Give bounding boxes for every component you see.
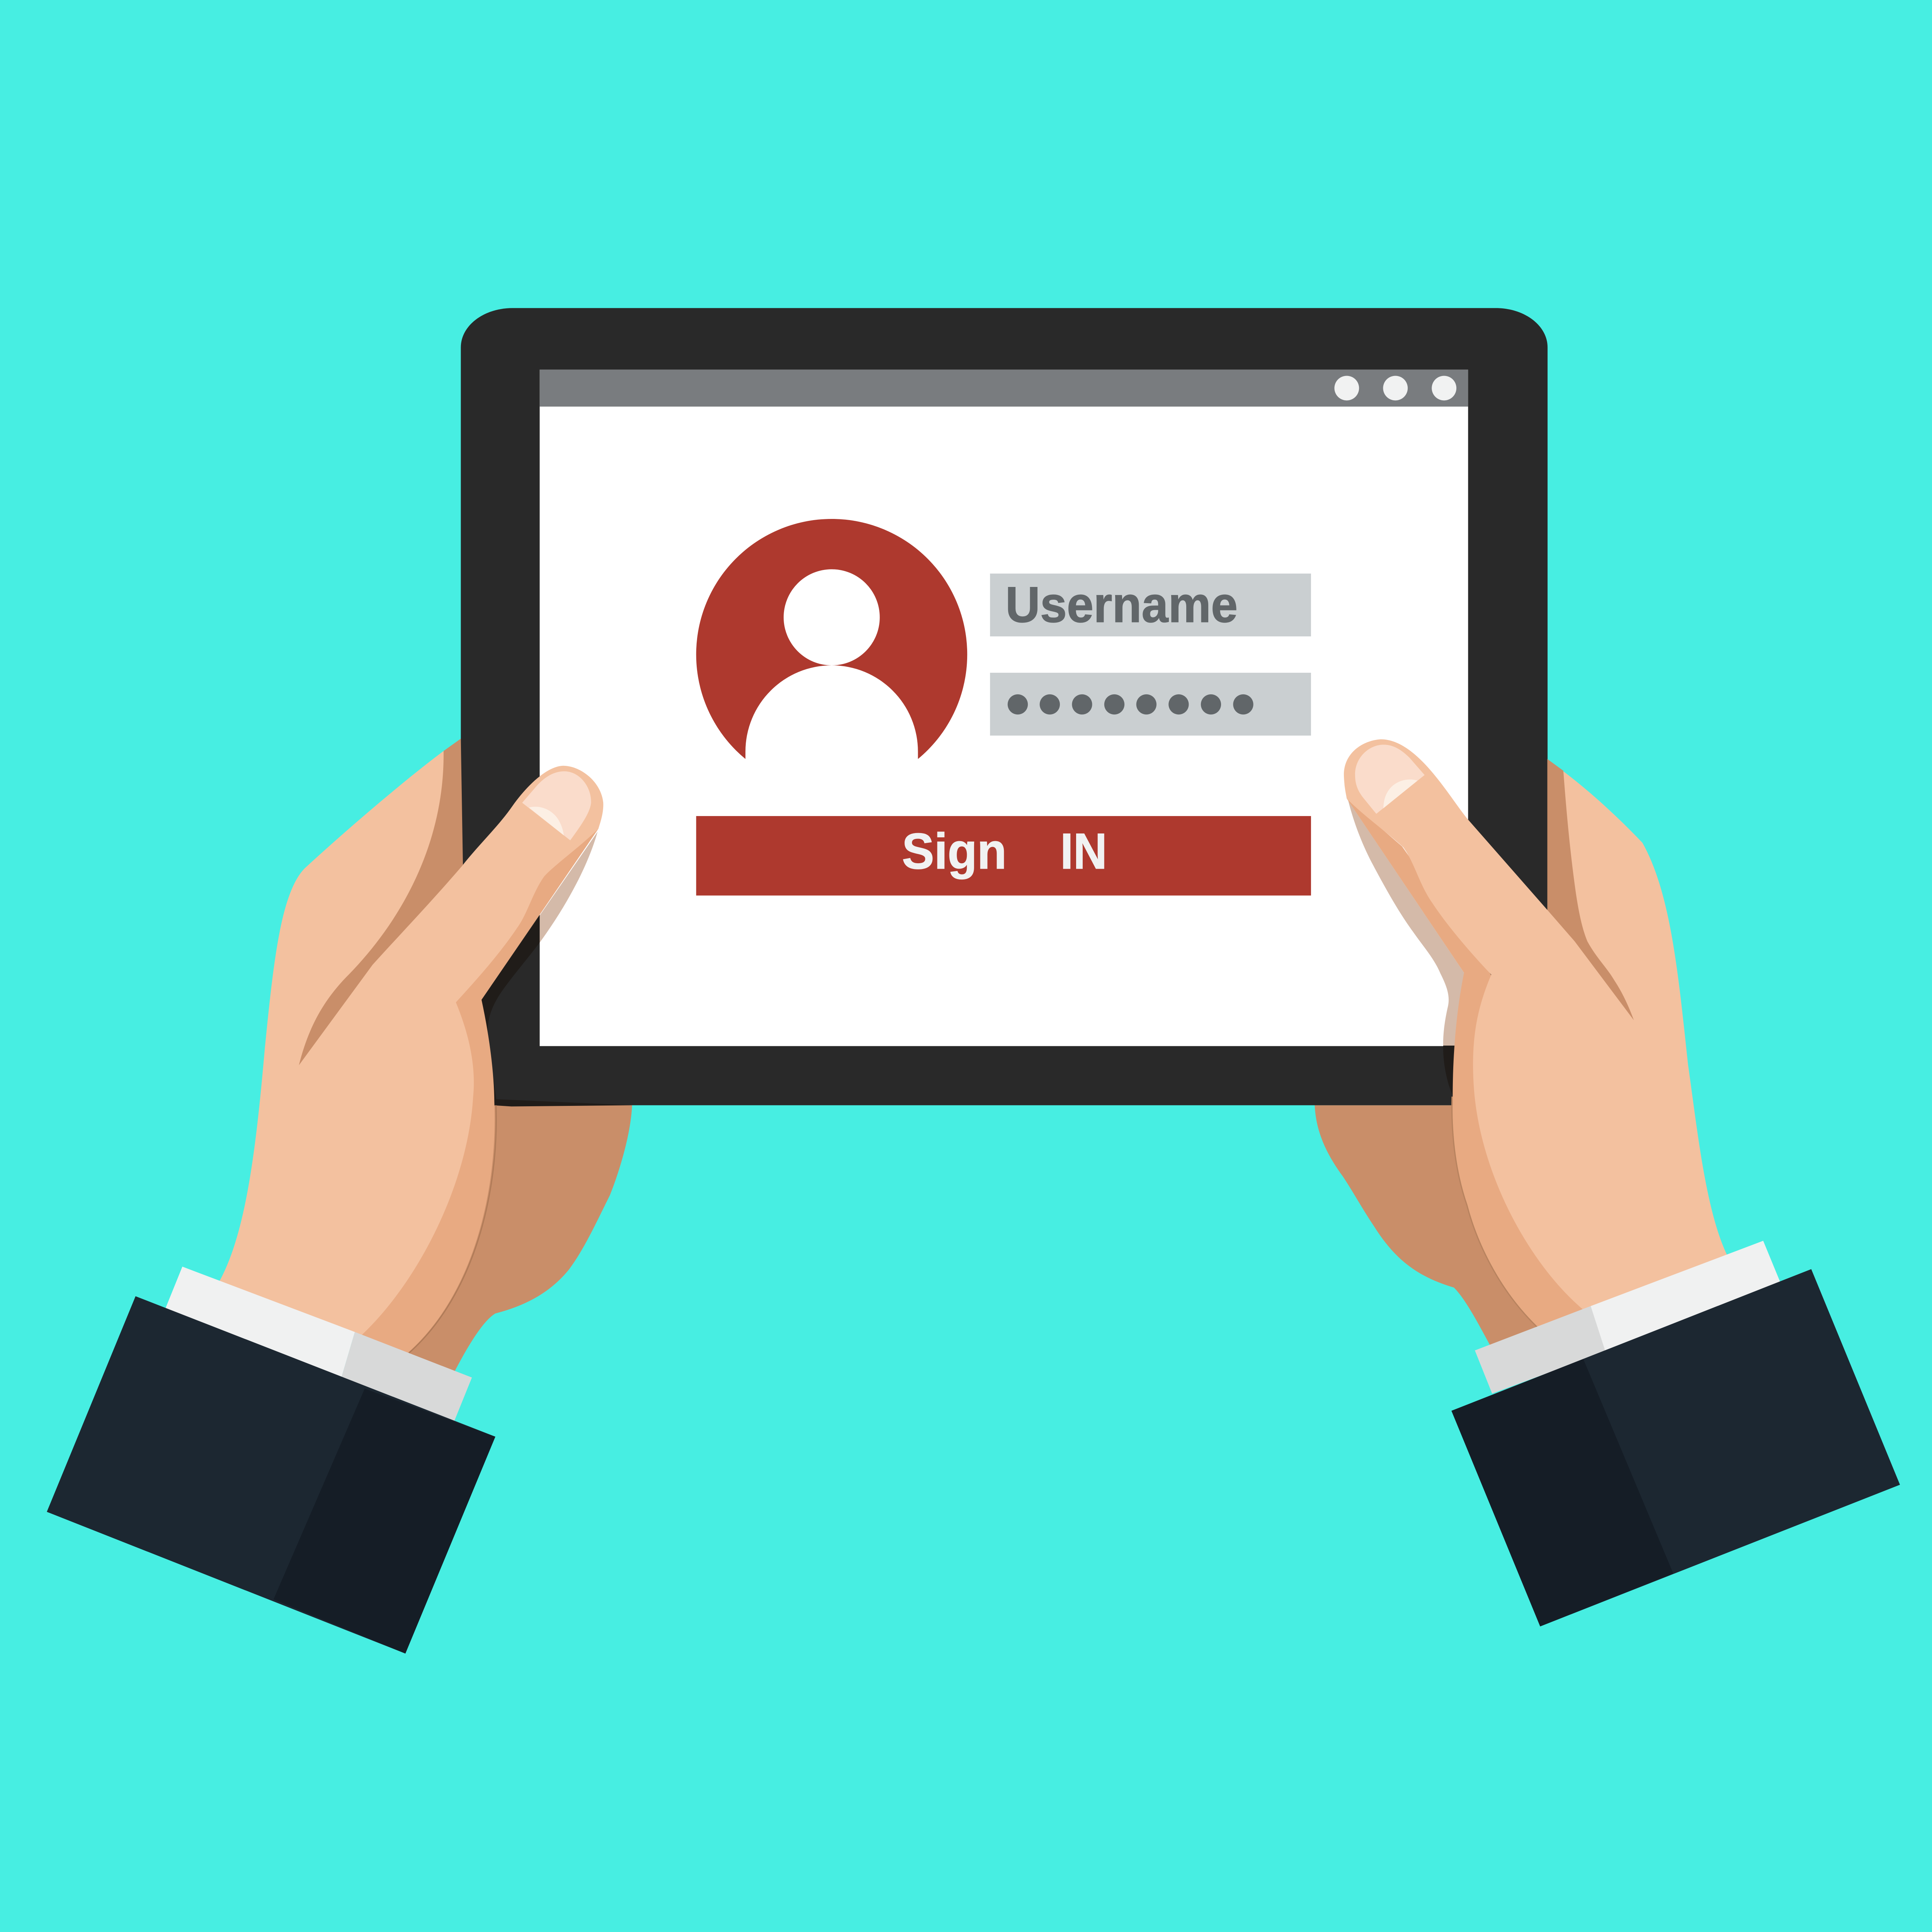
left shirt cuff (162, 1267, 355, 1386)
left sleeve (47, 1296, 495, 1653)
right hand shaded side (1347, 799, 1583, 1327)
screen (540, 370, 1468, 1046)
left shirt cuff shaded (339, 1332, 472, 1429)
left hand inner edge line (409, 1105, 496, 1353)
left thumb shadow on screen (540, 832, 598, 942)
right sleeve (1451, 1269, 1900, 1626)
tablet body (461, 308, 1548, 1105)
right hand main skin (1344, 739, 1731, 1310)
button background (696, 816, 1311, 896)
username label: Username (1005, 577, 1238, 633)
left thumbnail (522, 771, 591, 840)
left hand crease shadow (299, 739, 463, 1065)
right sleeve shaded (1451, 1359, 1673, 1626)
password dots (1008, 694, 1253, 714)
left hand (219, 739, 632, 1353)
sign in button (696, 816, 1311, 896)
right thumbnail (1355, 745, 1425, 814)
right hand crease shadow (1547, 759, 1634, 1020)
window title bar (540, 370, 1468, 406)
password box (990, 673, 1311, 736)
right shirt cuff shaded (1475, 1306, 1605, 1394)
right hand back fingers (1315, 1105, 1540, 1347)
right thumb shadow on screen (1344, 784, 1464, 1046)
right thumb shadow on bezel (1443, 1046, 1455, 1095)
left thumbnail highlight (529, 807, 564, 835)
left hand shaded side (361, 828, 599, 1353)
right thumbnail highlight (1383, 779, 1418, 808)
username field (990, 573, 1311, 636)
password field (990, 673, 1311, 736)
left sleeve shaded (274, 1389, 495, 1653)
user avatar icon (696, 519, 967, 759)
button label in: IN (1060, 823, 1107, 879)
left thumb shadow on bezel (474, 915, 540, 1105)
username box (990, 573, 1311, 636)
window control dots (1334, 376, 1456, 400)
right hand (1344, 739, 1731, 1327)
right shirt cuff (1591, 1241, 1781, 1352)
left cuff and sleeve (47, 1267, 495, 1653)
right cuff and sleeve (1451, 1241, 1900, 1626)
right hand inner edge line (1452, 1097, 1537, 1327)
left hand main skin (219, 751, 603, 1336)
left bottom edge shadow (493, 1099, 632, 1107)
tablet (461, 308, 1548, 1105)
left hand back fingers (400, 1105, 632, 1371)
button label sign: Sign (902, 823, 1007, 879)
